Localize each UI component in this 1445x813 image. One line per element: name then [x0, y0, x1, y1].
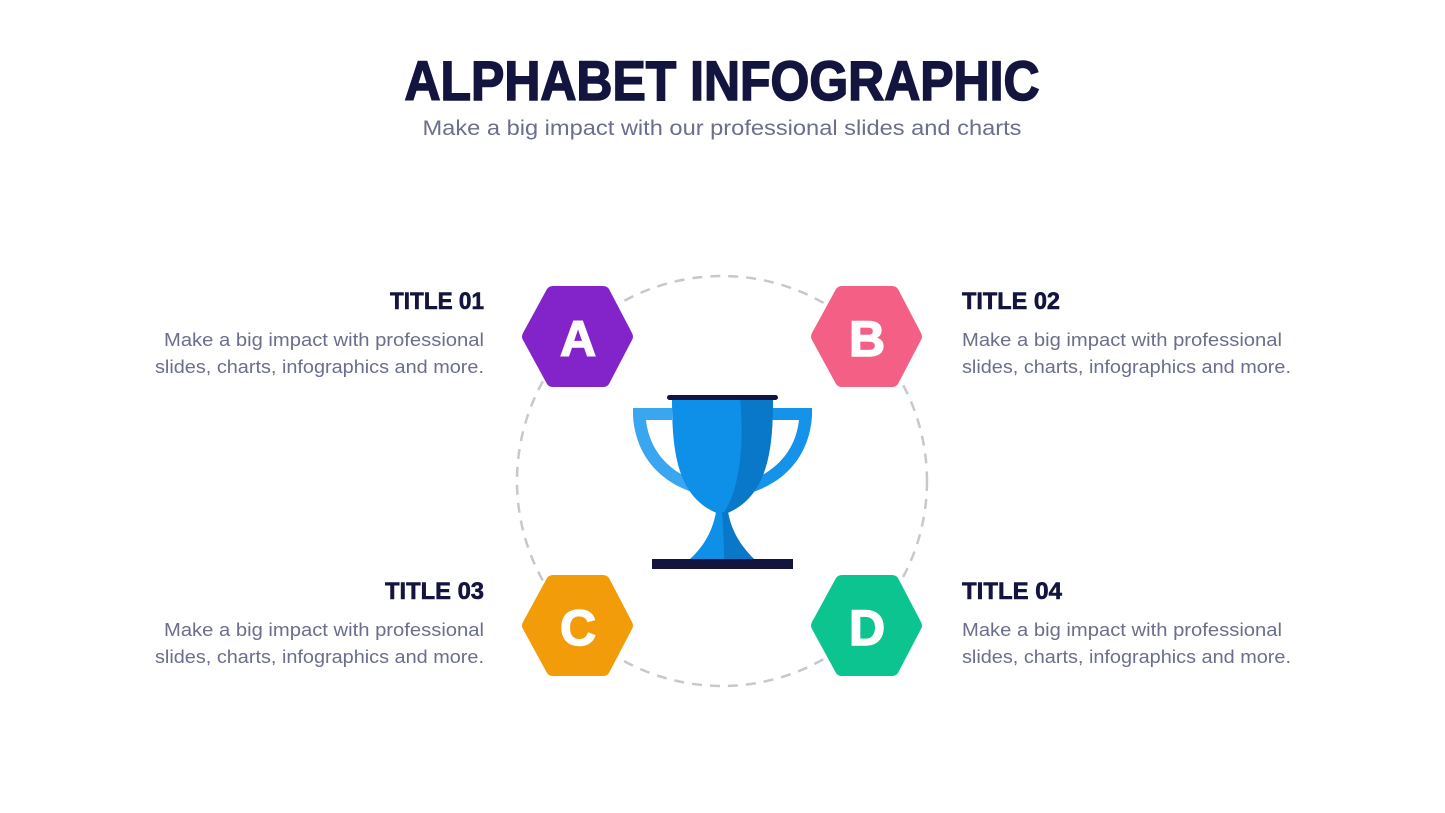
text block: title 04: TITLE 04 [962, 578, 1063, 605]
text block: title 01: TITLE 01 [390, 288, 484, 315]
text block: title 01 [155, 288, 484, 377]
hexagon D [811, 575, 922, 676]
hexagon A [522, 286, 633, 387]
trophy icon [633, 395, 812, 569]
hexagon C [522, 575, 633, 676]
text block: title 03: slides, charts, infographics and more. [155, 647, 484, 667]
text block: title 02: Make a big impact with professional [962, 330, 1282, 350]
text block: title 03 [155, 578, 484, 667]
text block: title 04 [962, 578, 1291, 667]
text block: title 03: Make a big impact with professional [164, 620, 484, 640]
hexagon B [811, 286, 922, 387]
hexagon C: C [560, 600, 596, 656]
text block: title 04: slides, charts, infographics and more. [962, 647, 1291, 667]
text block: title 01: slides, charts, infographics and more. [155, 357, 484, 377]
text block: title 04: Make a big impact with professional [962, 620, 1282, 640]
text block: title 02 [962, 288, 1291, 377]
text block: title 01: Make a big impact with professional [164, 330, 484, 350]
text block: title 02: TITLE 02 [962, 288, 1060, 315]
title: ALPHABET INFOGRAPHIC [404, 49, 1040, 112]
hexagon B: B [849, 311, 885, 367]
text block: title 02: slides, charts, infographics and more. [962, 357, 1291, 377]
dashed circle [517, 276, 927, 686]
hexagon D: D [849, 600, 885, 656]
subtitle: Make a big impact with our professional slides and charts [422, 117, 1022, 140]
text block: title 03: TITLE 03 [385, 578, 484, 605]
hexagon A: A [560, 311, 596, 367]
